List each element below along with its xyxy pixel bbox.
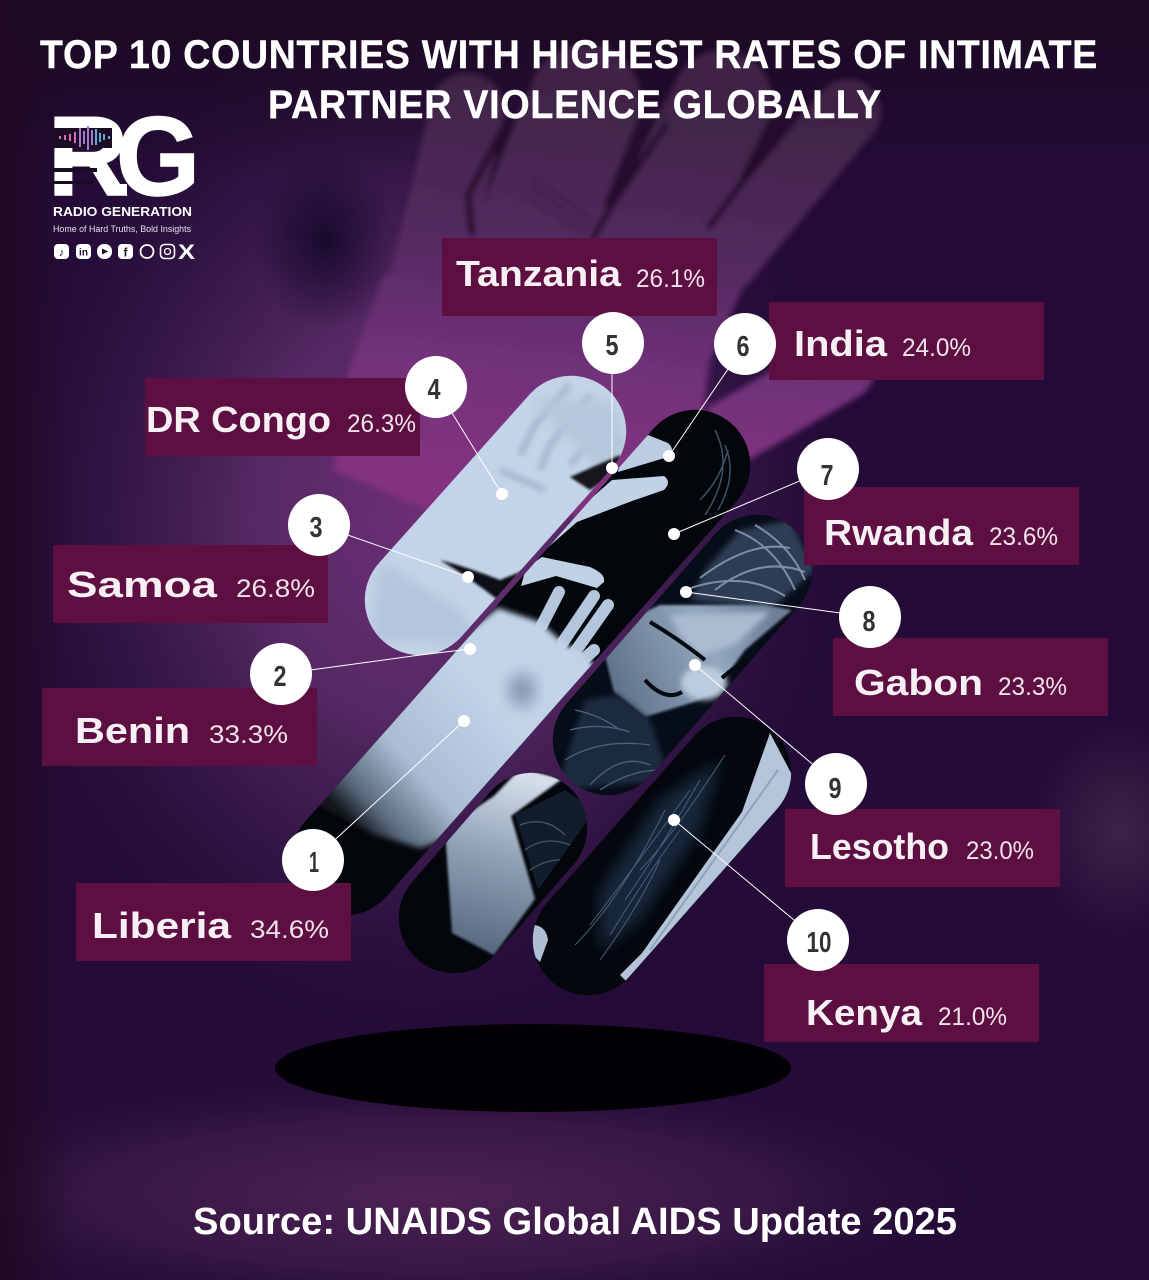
logo: Radio Generation: Home of Hard Truths, Bold Insights [53,224,191,234]
connector lines [281,343,870,940]
label: Benin: Benin [75,710,190,751]
marker 5 [582,312,644,474]
marker 4 [405,356,508,500]
marker 9: 9 [828,773,842,805]
label: India [769,302,1044,380]
label: Rwanda [804,487,1079,565]
marker 1 [282,715,470,891]
title [40,33,1098,127]
label: Benin [42,688,317,766]
marker 10 [668,814,849,971]
label: Kenya: Kenya [806,992,923,1033]
logo: Radio Generation: f [124,246,128,260]
marker 10: 10 [806,927,832,959]
label: Samoa [53,545,328,623]
marker 3: 3 [310,512,322,544]
label: Tanzania: 26.1% [636,265,705,293]
source note: Source: UNAIDS Global AIDS Update 2025 [193,1201,957,1243]
marker 2 [250,643,476,705]
marker 6: 6 [736,331,750,363]
label: Gabon: 23.3% [998,673,1067,701]
label: Kenya: 21.0% [938,1003,1007,1031]
label: DR Congo: 26.3% [347,410,416,438]
photo strip: arm and hair [280,400,760,920]
label: Samoa: 26.8% [236,575,315,603]
label: Liberia: 34.6% [250,916,329,944]
logo: Radio Generation: ♪ [59,247,64,259]
label: Tanzania: Tanzania [456,253,622,294]
floating shadow ellipse [275,1024,791,1112]
photo strip: crying face [550,510,820,800]
marker 6 [663,313,776,462]
logo: Radio Generation: G [116,94,200,219]
marker 5: 5 [606,330,618,362]
title: PARTNER VIOLENCE GLOBALLY [268,83,882,127]
label: India: 24.0% [902,334,971,362]
photo strip: raised hand [360,370,630,660]
label: Liberia: Liberia [92,905,232,946]
marker 1: 1 [309,847,319,879]
label: Gabon [833,638,1108,716]
label: DR Congo [145,378,420,456]
label: Lesotho: 23.0% [966,837,1034,865]
label: Benin: 33.3% [209,721,288,749]
title: TOP 10 COUNTRIES WITH HIGHEST RATES OF INTIMATE [40,33,1098,77]
logo: Radio Generation: in [79,248,88,258]
label: Gabon: Gabon [854,662,983,703]
marker 9 [689,659,867,815]
label: Samoa: Samoa [67,564,218,605]
marker 7 [668,438,859,540]
marker 2: 2 [274,661,286,693]
background blurred hand [333,100,860,520]
label: Rwanda: Rwanda [824,512,974,553]
logo: Radio Generation: R [48,94,128,219]
marker 8 [680,586,901,648]
marker 3 [288,494,474,583]
marker 8: 8 [862,606,876,638]
label: DR Congo: DR Congo [146,399,331,440]
label: Lesotho [785,809,1060,887]
label: Lesotho: Lesotho [810,826,949,867]
label: Tanzania [442,238,717,316]
label: Liberia [76,883,351,961]
label: Rwanda: 23.6% [989,523,1058,551]
logo: Radio Generation: X [178,241,195,264]
photo strip: long hair [525,710,800,1000]
marker 4: 4 [428,374,440,406]
logo: Radio Generation: RADIO GENERATION [53,205,192,219]
label: India: India [794,323,888,364]
label: Kenya [764,964,1039,1042]
photo strip: shoulder [398,772,588,974]
logo: Radio Generation [48,94,200,264]
marker 7: 7 [820,460,834,492]
